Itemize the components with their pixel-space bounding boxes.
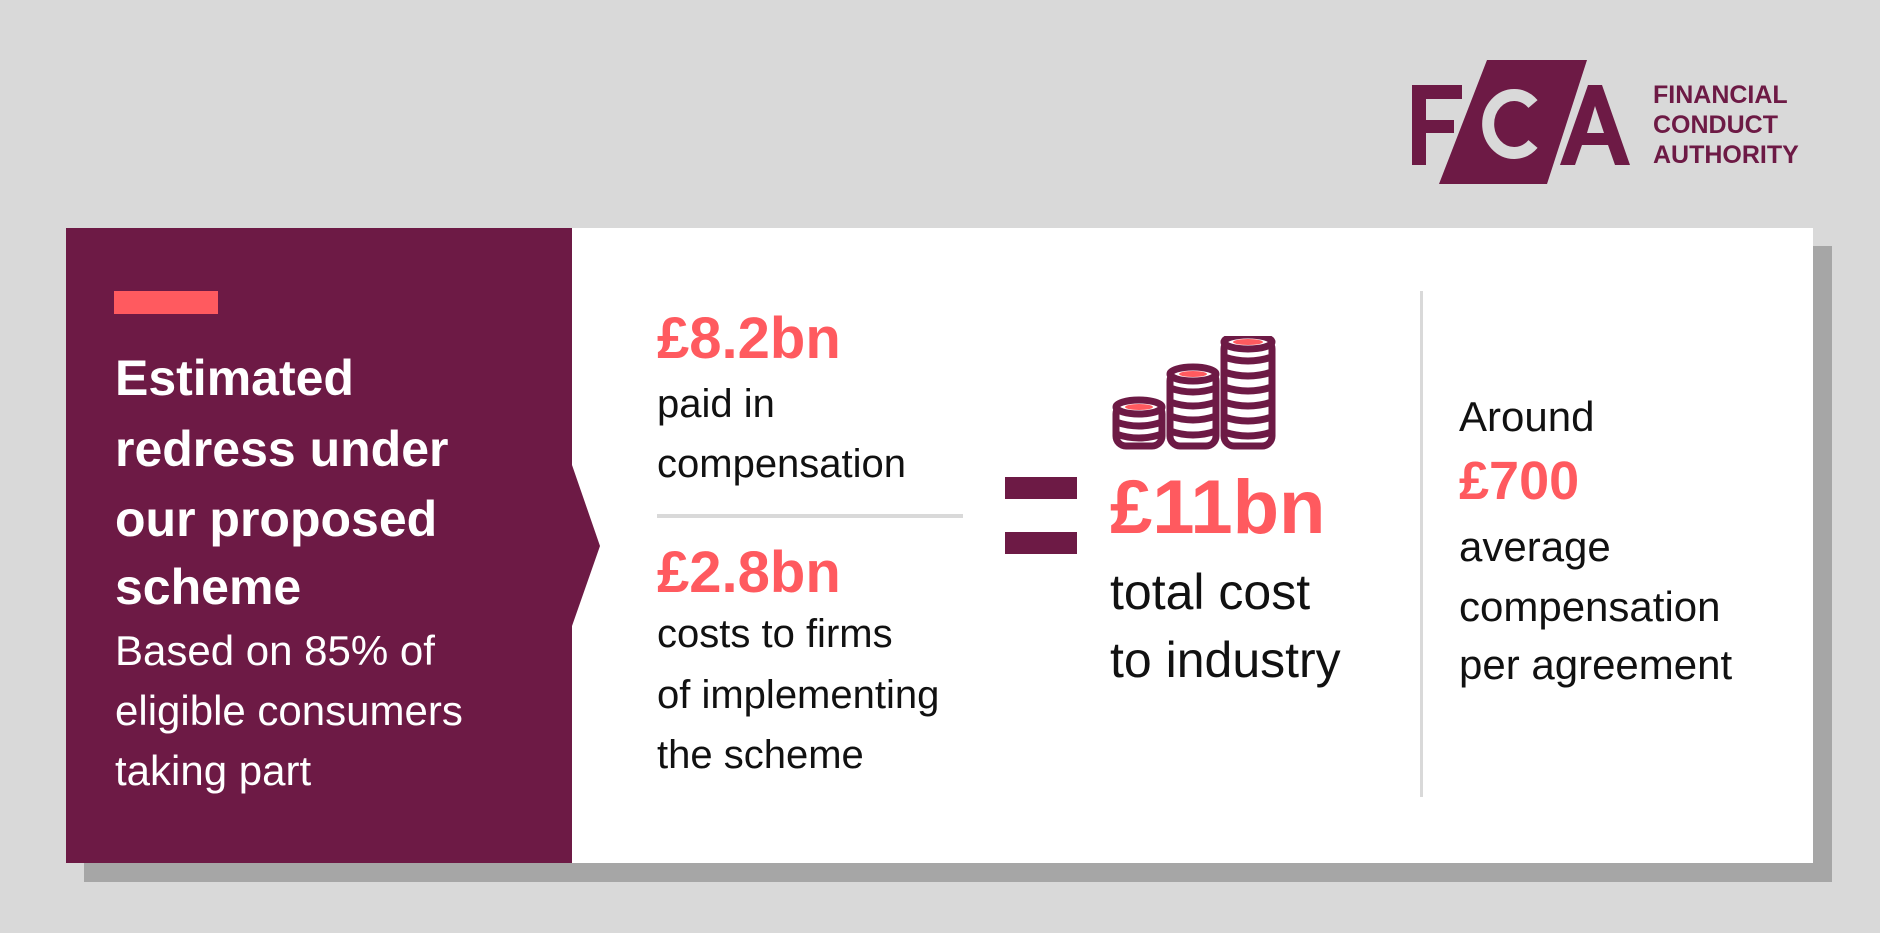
- stat: firm costs: [657, 540, 939, 777]
- heading: Estimated: [115, 350, 354, 406]
- icon: equals: [1005, 477, 1077, 554]
- stat: compensation: compensation: [657, 442, 906, 486]
- heading: [115, 350, 448, 615]
- stat: firm costs: costs to firms: [657, 612, 893, 656]
- logo: FINANCIAL: [1653, 81, 1788, 109]
- stat: firm costs: of implementing: [657, 673, 939, 717]
- subtitle: eligible consumers: [115, 687, 463, 734]
- stat: compensation: paid in: [657, 382, 775, 426]
- icon: coins: [1112, 336, 1276, 450]
- stat: total: total cost: [1110, 564, 1310, 620]
- stat: average: £700: [1459, 451, 1579, 511]
- stat: compensation: [657, 306, 906, 486]
- stat: firm costs: the scheme: [657, 733, 864, 777]
- stat: total: [1110, 465, 1341, 688]
- stat: total: £11bn: [1110, 465, 1325, 550]
- heading: redress under: [115, 421, 448, 477]
- stat: compensation: £8.2bn: [657, 306, 841, 371]
- stat: average: average: [1459, 523, 1611, 570]
- panel: main card: [66, 228, 1813, 863]
- subtitle: [115, 627, 463, 794]
- logo: AUTHORITY: [1653, 141, 1799, 169]
- subtitle: taking part: [115, 747, 311, 794]
- stat: total: to industry: [1110, 632, 1341, 688]
- logo: CONDUCT: [1653, 111, 1778, 139]
- subtitle: Based on 85% of: [115, 627, 435, 674]
- stat: firm costs: £2.8bn: [657, 540, 841, 605]
- shadow: [84, 246, 1832, 882]
- logo: [1412, 60, 1799, 184]
- heading: our proposed: [115, 491, 437, 547]
- accent bar: [114, 291, 218, 314]
- stat: average: per agreement: [1459, 641, 1732, 688]
- stat: average: [1459, 393, 1732, 688]
- stat: average: Around: [1459, 393, 1594, 440]
- stat: average: compensation: [1459, 583, 1720, 630]
- heading: scheme: [115, 559, 301, 615]
